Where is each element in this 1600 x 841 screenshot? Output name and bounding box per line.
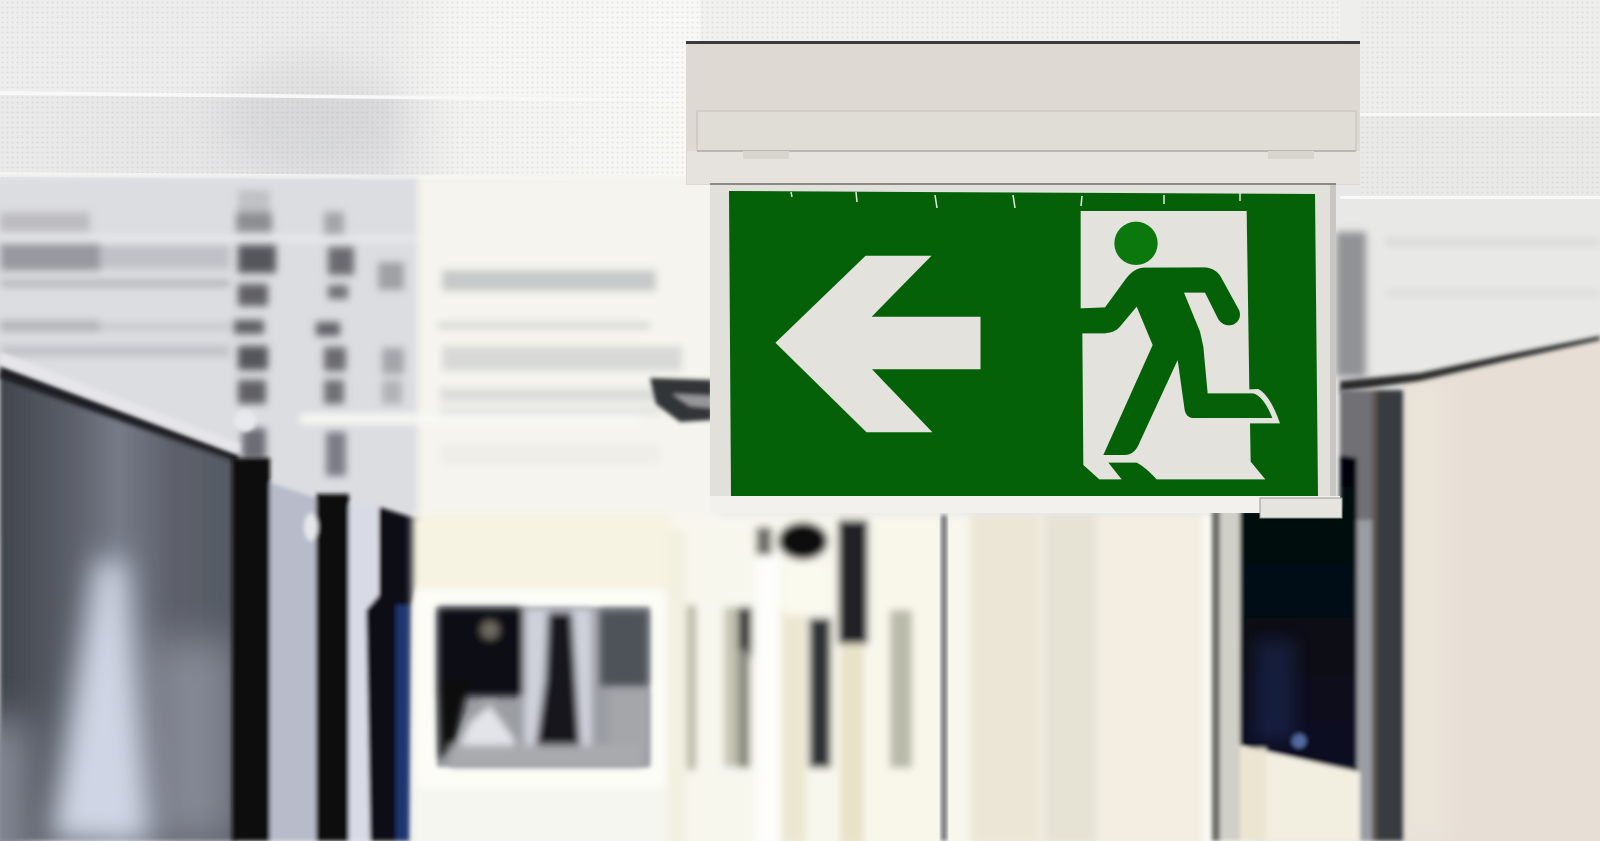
ceiling: blurred dark vertical reflections: [234, 190, 404, 476]
running person exit door: [1079, 211, 1280, 479]
exit sign plate: [710, 183, 1342, 518]
ceiling: blurred light strips: [0, 178, 718, 538]
icon: door: [1081, 211, 1280, 479]
security camera blur: [650, 378, 712, 422]
picture on far wall: [418, 590, 664, 788]
corridor: far end wall and doors: [412, 515, 1252, 841]
sign housing: [686, 41, 1360, 185]
ceiling: strip above sign housing: [680, 0, 1360, 44]
green sign panel: [729, 191, 1318, 496]
wall: corridor posts: [232, 410, 420, 841]
arrow pointing left: [775, 256, 980, 432]
wall: right beige wall and dark door: [1212, 336, 1600, 841]
ceiling: left perforated tiles: [0, 0, 1360, 182]
icon: runner head: [1114, 222, 1158, 265]
wall: left dark panel: [0, 352, 240, 841]
icon: runner body: [1079, 267, 1272, 455]
ceiling: right tiles: [1336, 0, 1600, 397]
